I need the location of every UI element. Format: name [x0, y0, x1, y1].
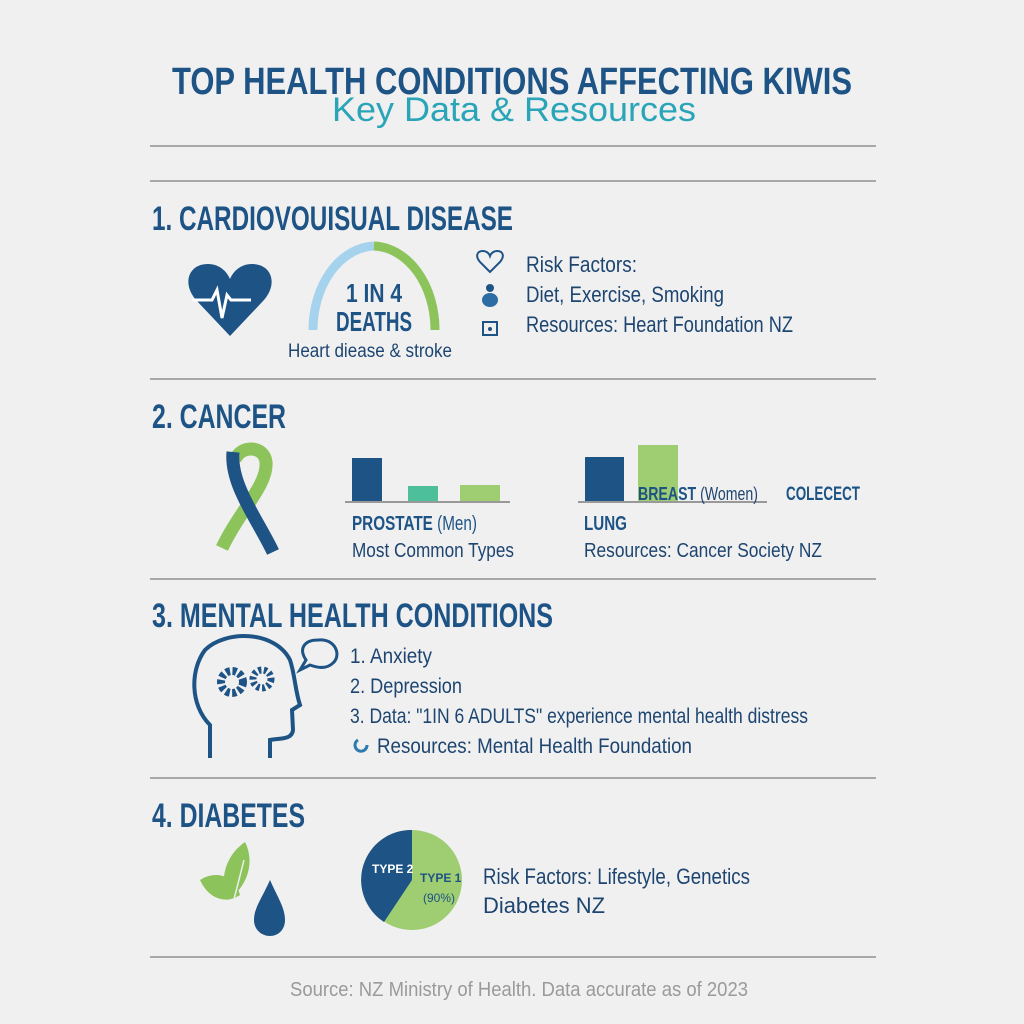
bar chart: lung breast: BREAST (Women) — [638, 484, 758, 504]
diabetes text: Risk Factors: Lifestyle, Genetics — [483, 864, 750, 889]
diabetes text — [483, 864, 750, 918]
mental health list: 3. Data: "1IN 6 ADULTS" experience mental health distress — [350, 705, 808, 728]
subtitle: Key Data & Resources — [332, 91, 696, 129]
icon: heart — [188, 264, 272, 336]
bar chart: lung breast — [578, 445, 860, 562]
bar chart: prostate: Most Common Types — [352, 540, 514, 562]
mental health list: 2. Depression — [350, 675, 462, 698]
bar chart: prostate: PROSTATE (Men) — [352, 513, 477, 535]
risk factor list: Risk Factors: — [526, 252, 637, 277]
pie chart: diabetes types: (90%) — [423, 891, 455, 905]
risk factor list — [477, 251, 793, 337]
panel: cardiovascular — [152, 200, 793, 362]
title: TOP HEALTH CONDITIONS AFFECTING KIWIS — [172, 61, 852, 103]
bar chart: lung breast: Resources: Cancer Society NZ — [584, 540, 822, 562]
pie chart: diabetes types — [361, 830, 462, 930]
heading: mental health: 3. MENTAL HEALTH CONDITIONS — [152, 597, 553, 635]
icon: ribbon — [222, 449, 273, 552]
risk factor list: Resources: Heart Foundation NZ — [526, 312, 793, 337]
gauge: 1 in 4 deaths: 1 IN 4 — [346, 278, 402, 308]
pie chart: diabetes types: TYPE 2 — [372, 862, 414, 876]
gauge: 1 in 4 deaths: Heart diease & stroke — [288, 341, 452, 362]
mental health list: Resources: Mental Health Foundation — [377, 735, 692, 758]
mental health list: 1. Anxiety — [350, 645, 432, 668]
heading: cardiovascular: 1. CARDIOVOUISUAL DISEASE — [152, 200, 513, 238]
panel: cancer — [152, 398, 860, 562]
bar chart: lung breast: COLECECT — [786, 484, 860, 505]
icon: leaves and drop — [200, 842, 285, 936]
bar chart: prostate — [345, 458, 514, 562]
heading: diabetes: 4. DIABETES — [152, 797, 305, 835]
gauge: 1 in 4 deaths: DEATHS — [336, 306, 412, 337]
panel: diabetes — [152, 797, 750, 936]
diabetes text: Diabetes NZ — [483, 893, 605, 918]
bar chart: lung breast: LUNG — [584, 513, 627, 535]
risk factor list: Diet, Exercise, Smoking — [526, 282, 724, 307]
mental health list — [350, 645, 808, 758]
pie chart: diabetes types: TYPE 1 — [420, 871, 462, 885]
heading: cancer: 2. CANCER — [152, 398, 286, 436]
icon: head with gears — [194, 636, 337, 758]
panel: mental health — [152, 597, 808, 758]
icon: heart outline — [477, 251, 503, 272]
gauge: 1 in 4 deaths — [288, 246, 452, 362]
footer source: Source: NZ Ministry of Health. Data accurate as of 2023 — [290, 979, 748, 1001]
